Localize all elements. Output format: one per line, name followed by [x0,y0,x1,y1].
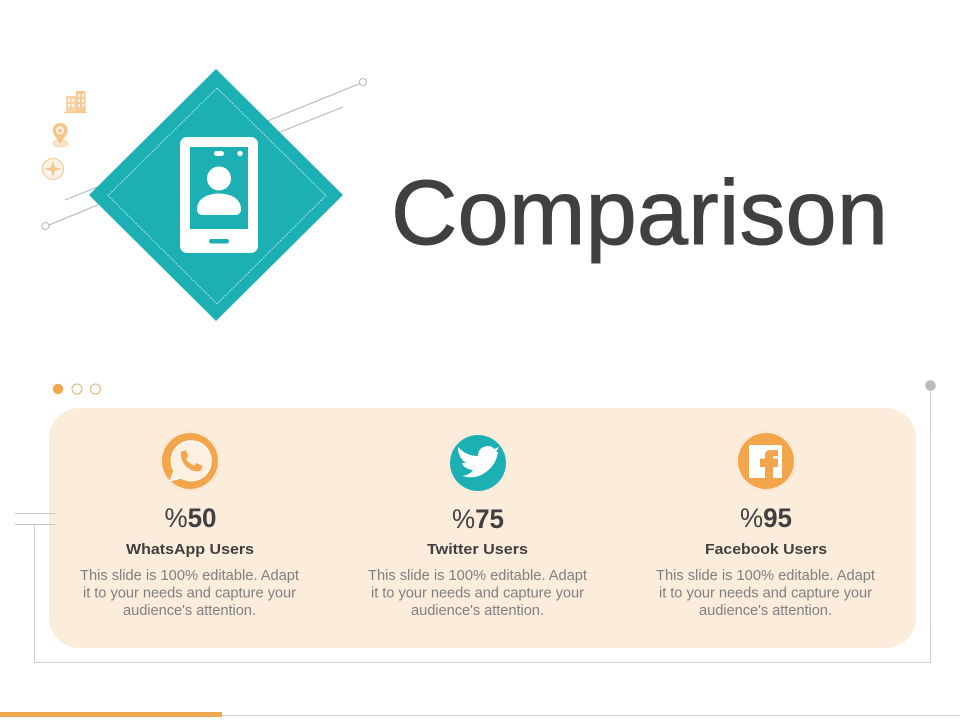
description: it to your needs and capture your [371,586,584,602]
label: Facebook Users: Facebook Users [705,541,827,558]
description: audience's attention. [123,603,256,619]
description: This slide is 100% editable. Adapt [80,568,299,584]
label: Twitter Users: Twitter Users [427,541,528,558]
label: WhatsApp Users: WhatsApp Users [126,541,254,558]
description: audience's attention. [699,603,832,619]
description: This slide is 100% editable. Adapt [656,568,875,584]
panel: comparison cards [49,408,916,648]
icon: location pin [53,123,68,147]
WhatsApp column [80,432,299,619]
stat: %50: %50 [164,503,216,533]
icon: phone with user [180,137,258,253]
description: audience's attention. [411,603,544,619]
description: This slide is 100% editable. Adapt [368,568,587,584]
description: it to your needs and capture your [83,586,296,602]
Facebook column [656,432,875,619]
stat: %95: %95 [740,503,792,533]
footer progress bar [0,712,960,717]
stat: %75: %75 [452,504,504,534]
icon: facebook [736,432,796,490]
icon: twitter [448,434,508,492]
left accent lines [15,514,55,524]
pagination dots [53,384,100,394]
teal diamond with phone [89,69,343,321]
icon: compass [42,158,64,180]
Twitter column [368,434,587,619]
title: Comparison [391,162,888,264]
description: it to your needs and capture your [659,586,872,602]
icon: building [64,91,87,112]
frame outline [34,380,936,662]
connector lines behind diamond [42,78,366,230]
icon: whatsapp [160,432,220,490]
